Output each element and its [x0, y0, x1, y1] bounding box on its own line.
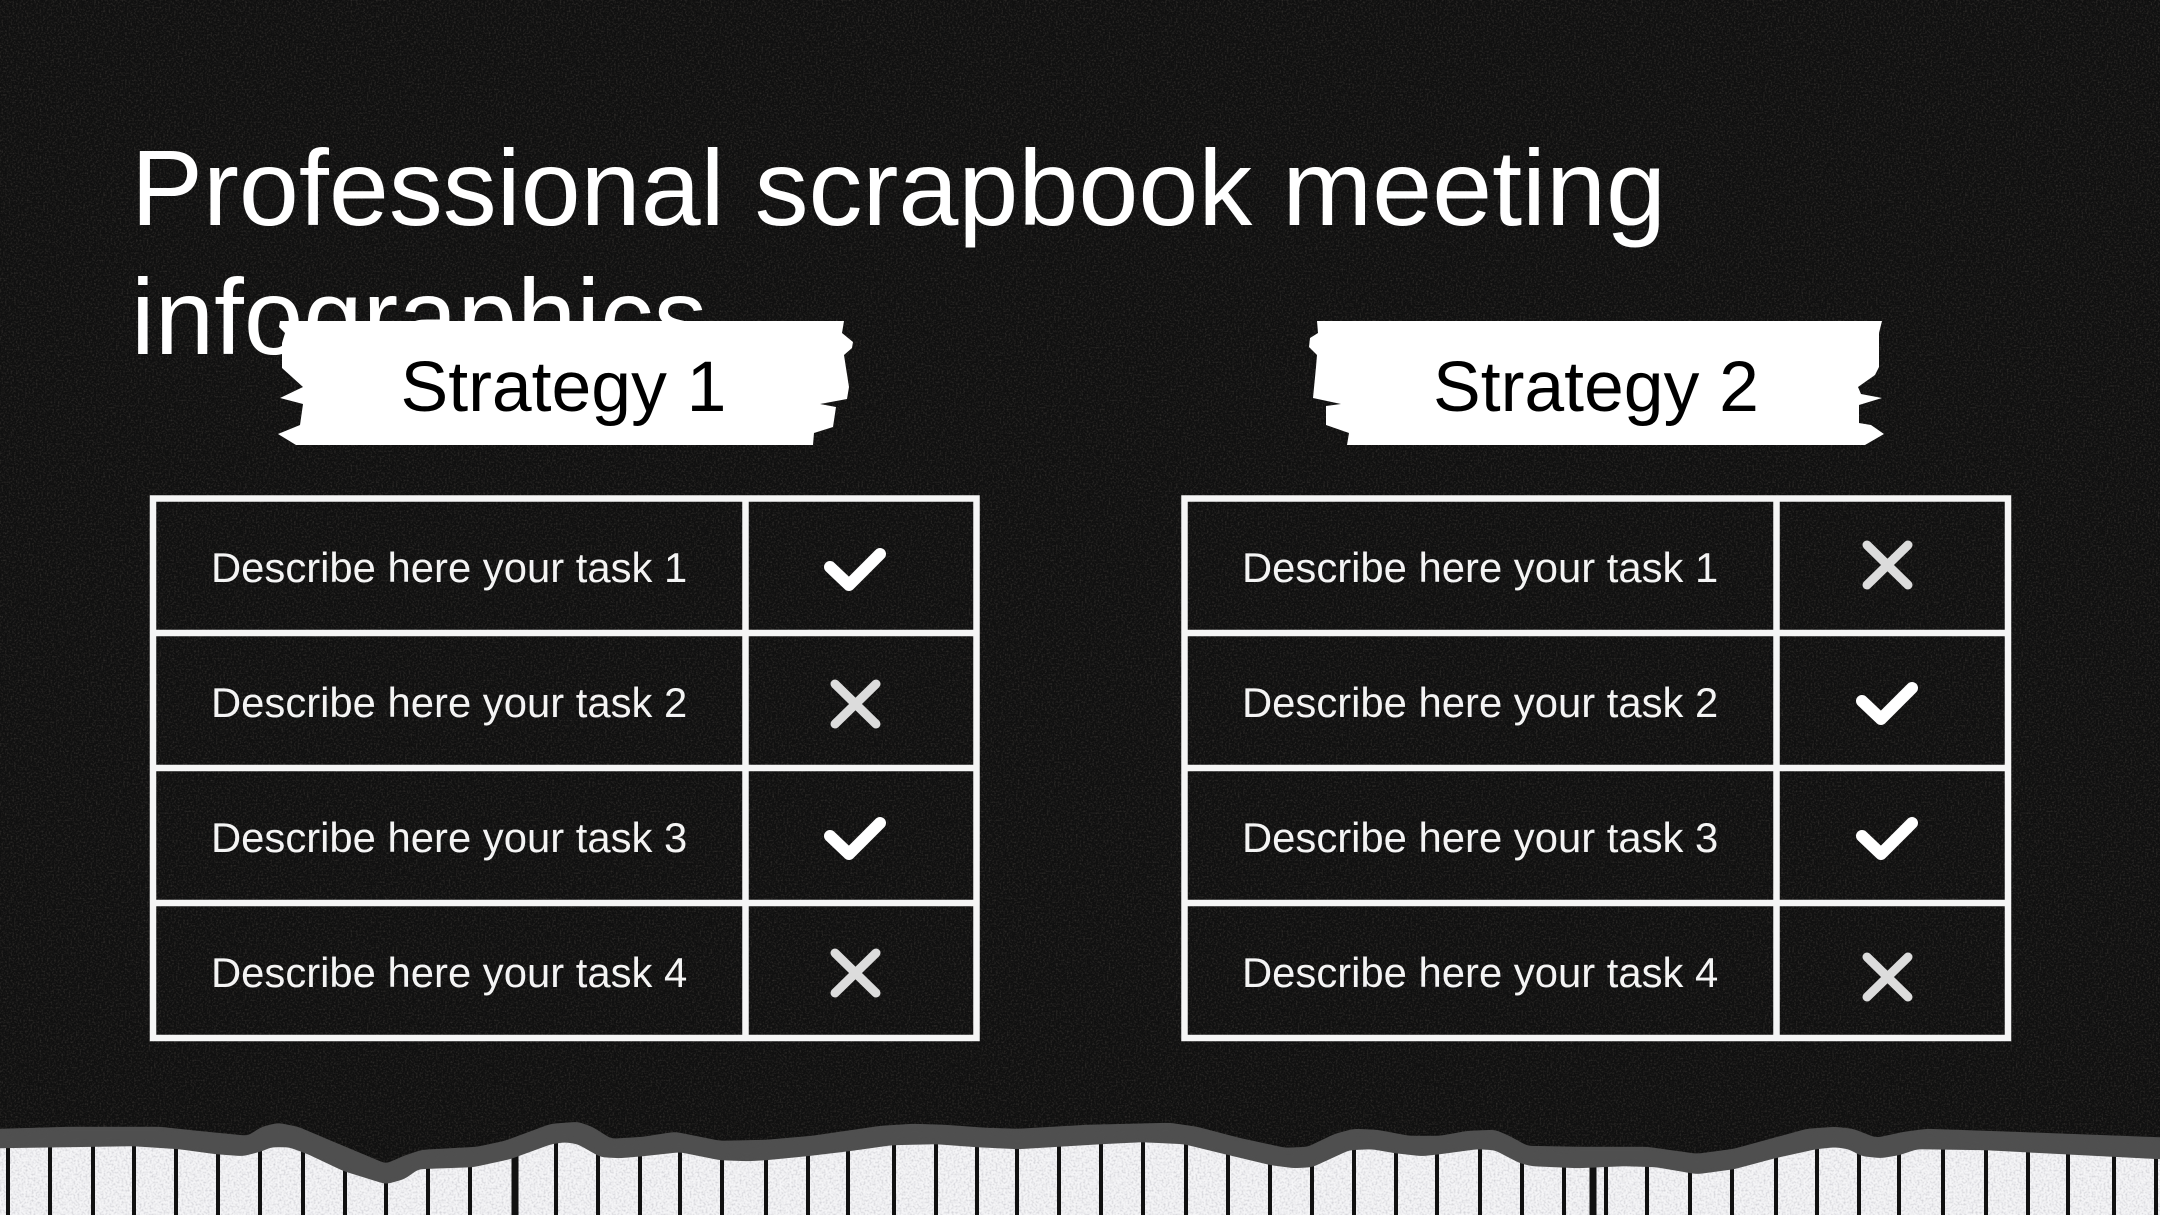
panel: strategy 1 — [153, 321, 976, 1038]
icon: cross row 4 — [835, 953, 876, 993]
tape label: Strategy 1 — [278, 321, 853, 445]
task labels: Describe here your task 3 — [1242, 814, 1718, 861]
panel: strategy 2 — [1184, 321, 2008, 1038]
task labels: Describe here your task 3 — [211, 814, 687, 861]
icon: check row 3 — [1862, 823, 1912, 854]
tape label: Strategy 2 — [1309, 321, 1884, 445]
table: strategy 2 tasks — [1184, 498, 2008, 1038]
task labels — [1242, 544, 1718, 996]
table grid — [153, 498, 976, 1038]
title: infographics — [131, 256, 707, 377]
icon: cross row 4 — [1867, 957, 1908, 997]
table grid — [1184, 498, 2008, 1038]
icon: check row 2 — [1862, 688, 1912, 719]
dark grey torn band — [0, 1123, 2160, 1183]
task labels: Describe here your task 4 — [1242, 949, 1718, 996]
icon: check row 3 — [830, 823, 880, 854]
task labels: Describe here your task 2 — [1242, 679, 1718, 726]
icon: cross row 1 — [1867, 545, 1908, 585]
task labels — [211, 544, 687, 996]
torn striped paper strip — [0, 1120, 2160, 1215]
title — [131, 127, 1666, 377]
white paper with grain and black stripes — [0, 1142, 2160, 1215]
table: strategy 1 tasks — [153, 498, 976, 1038]
task labels: Describe here your task 1 — [1242, 544, 1718, 591]
task labels: Describe here your task 4 — [211, 949, 687, 996]
task labels: Describe here your task 1 — [211, 544, 687, 591]
icon: cross row 2 — [835, 684, 876, 724]
tape label: Strategy 1: Strategy 1 — [401, 347, 726, 427]
tape label: Strategy 2: Strategy 2 — [1433, 347, 1759, 427]
task labels: Describe here your task 2 — [211, 679, 687, 726]
icon: check row 1 — [830, 554, 880, 585]
title: Professional scrapbook meeting — [131, 127, 1666, 248]
